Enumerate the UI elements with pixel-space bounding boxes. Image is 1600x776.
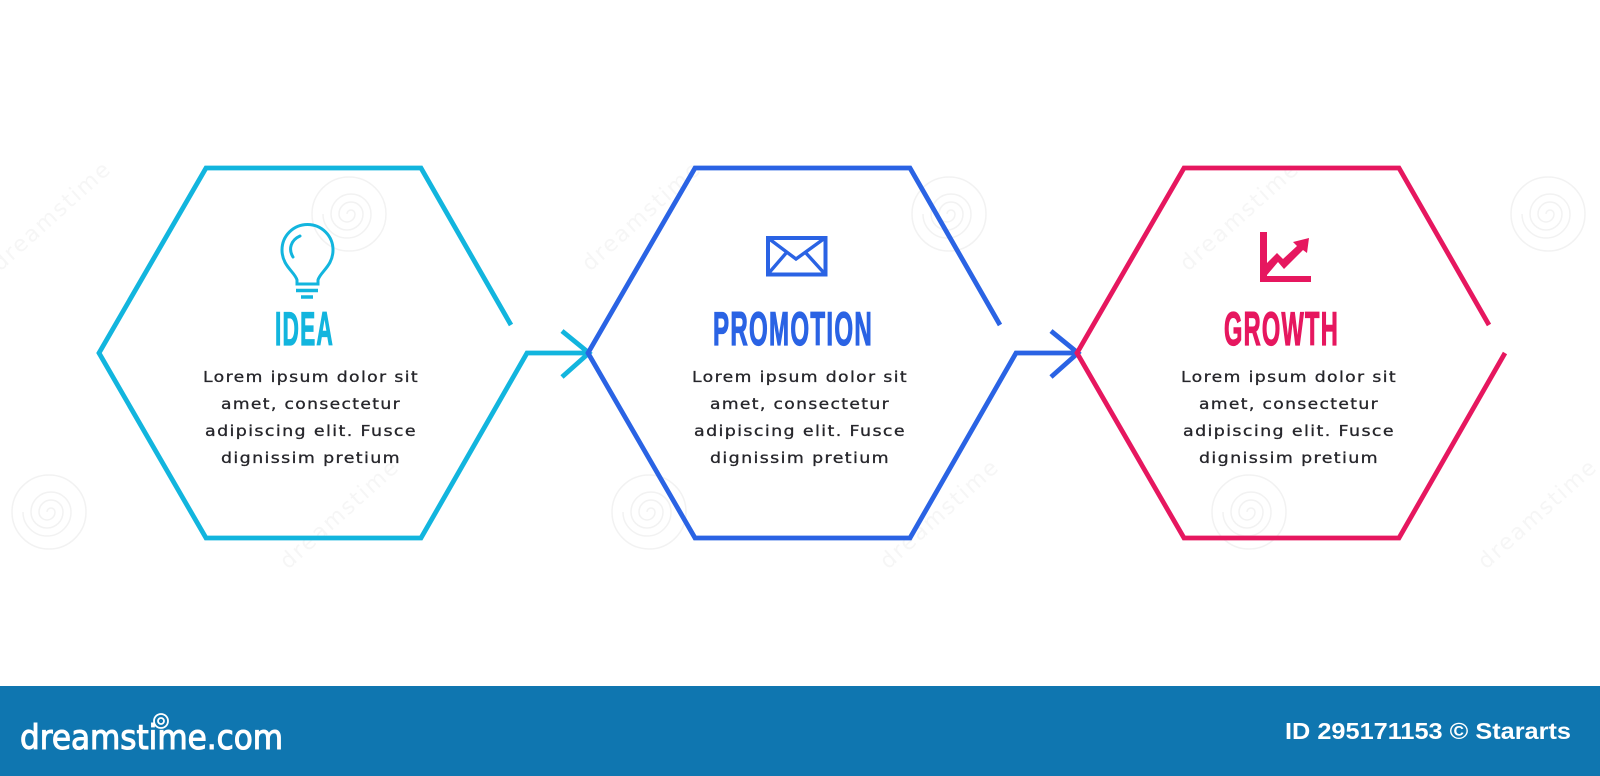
panel: idea: IDEA (275, 302, 334, 355)
text block: growth: Lorem ipsum dolor sit (1181, 368, 1397, 386)
panel: growth (1077, 168, 1505, 538)
text block: growth: dignissim pretium (1199, 449, 1379, 467)
text block: promotion (692, 368, 908, 467)
image id and credit: ID 295171153 © Stararts (1285, 718, 1571, 744)
text block: idea: amet, consectetur (221, 395, 401, 413)
watermark pattern: dreamstime (875, 456, 1003, 574)
watermark pattern: dreamstime (1175, 158, 1303, 276)
text block: idea (203, 368, 419, 467)
icon: light bulb (282, 224, 333, 297)
footer banner (0, 686, 1600, 776)
watermark pattern: dreamstime (1473, 456, 1600, 574)
text block: growth: amet, consectetur (1199, 395, 1379, 413)
text block: promotion: adipiscing elit. Fusce (694, 422, 906, 440)
text block: growth (1181, 368, 1397, 467)
panel: idea (99, 168, 589, 538)
panel: promotion (588, 168, 1078, 538)
logo spiral icon (154, 714, 168, 728)
watermark pattern (0, 158, 1600, 574)
text block: growth: adipiscing elit. Fusce (1183, 422, 1395, 440)
hexagon outline with arrow: idea (99, 168, 589, 538)
hexagon outline: growth (1077, 168, 1505, 538)
heading: promotion: PROMOTION (713, 302, 873, 355)
icon: growth chart (1260, 232, 1311, 282)
watermark pattern: dreamstime (577, 158, 705, 276)
text block: idea: Lorem ipsum dolor sit (203, 368, 419, 386)
text block: promotion: dignissim pretium (710, 449, 890, 467)
text block: promotion: amet, consectetur (710, 395, 890, 413)
text block: promotion: Lorem ipsum dolor sit (692, 368, 908, 386)
heading: growth: GROWTH (1224, 302, 1339, 355)
text block: idea: dignissim pretium (221, 449, 401, 467)
watermark pattern: dreamstime (275, 456, 403, 574)
icon: envelope (768, 238, 826, 274)
hexagon outline with arrow: promotion (588, 168, 1078, 538)
text block: idea: adipiscing elit. Fusce (205, 422, 417, 440)
logo text: dreamstime.com (20, 718, 283, 758)
